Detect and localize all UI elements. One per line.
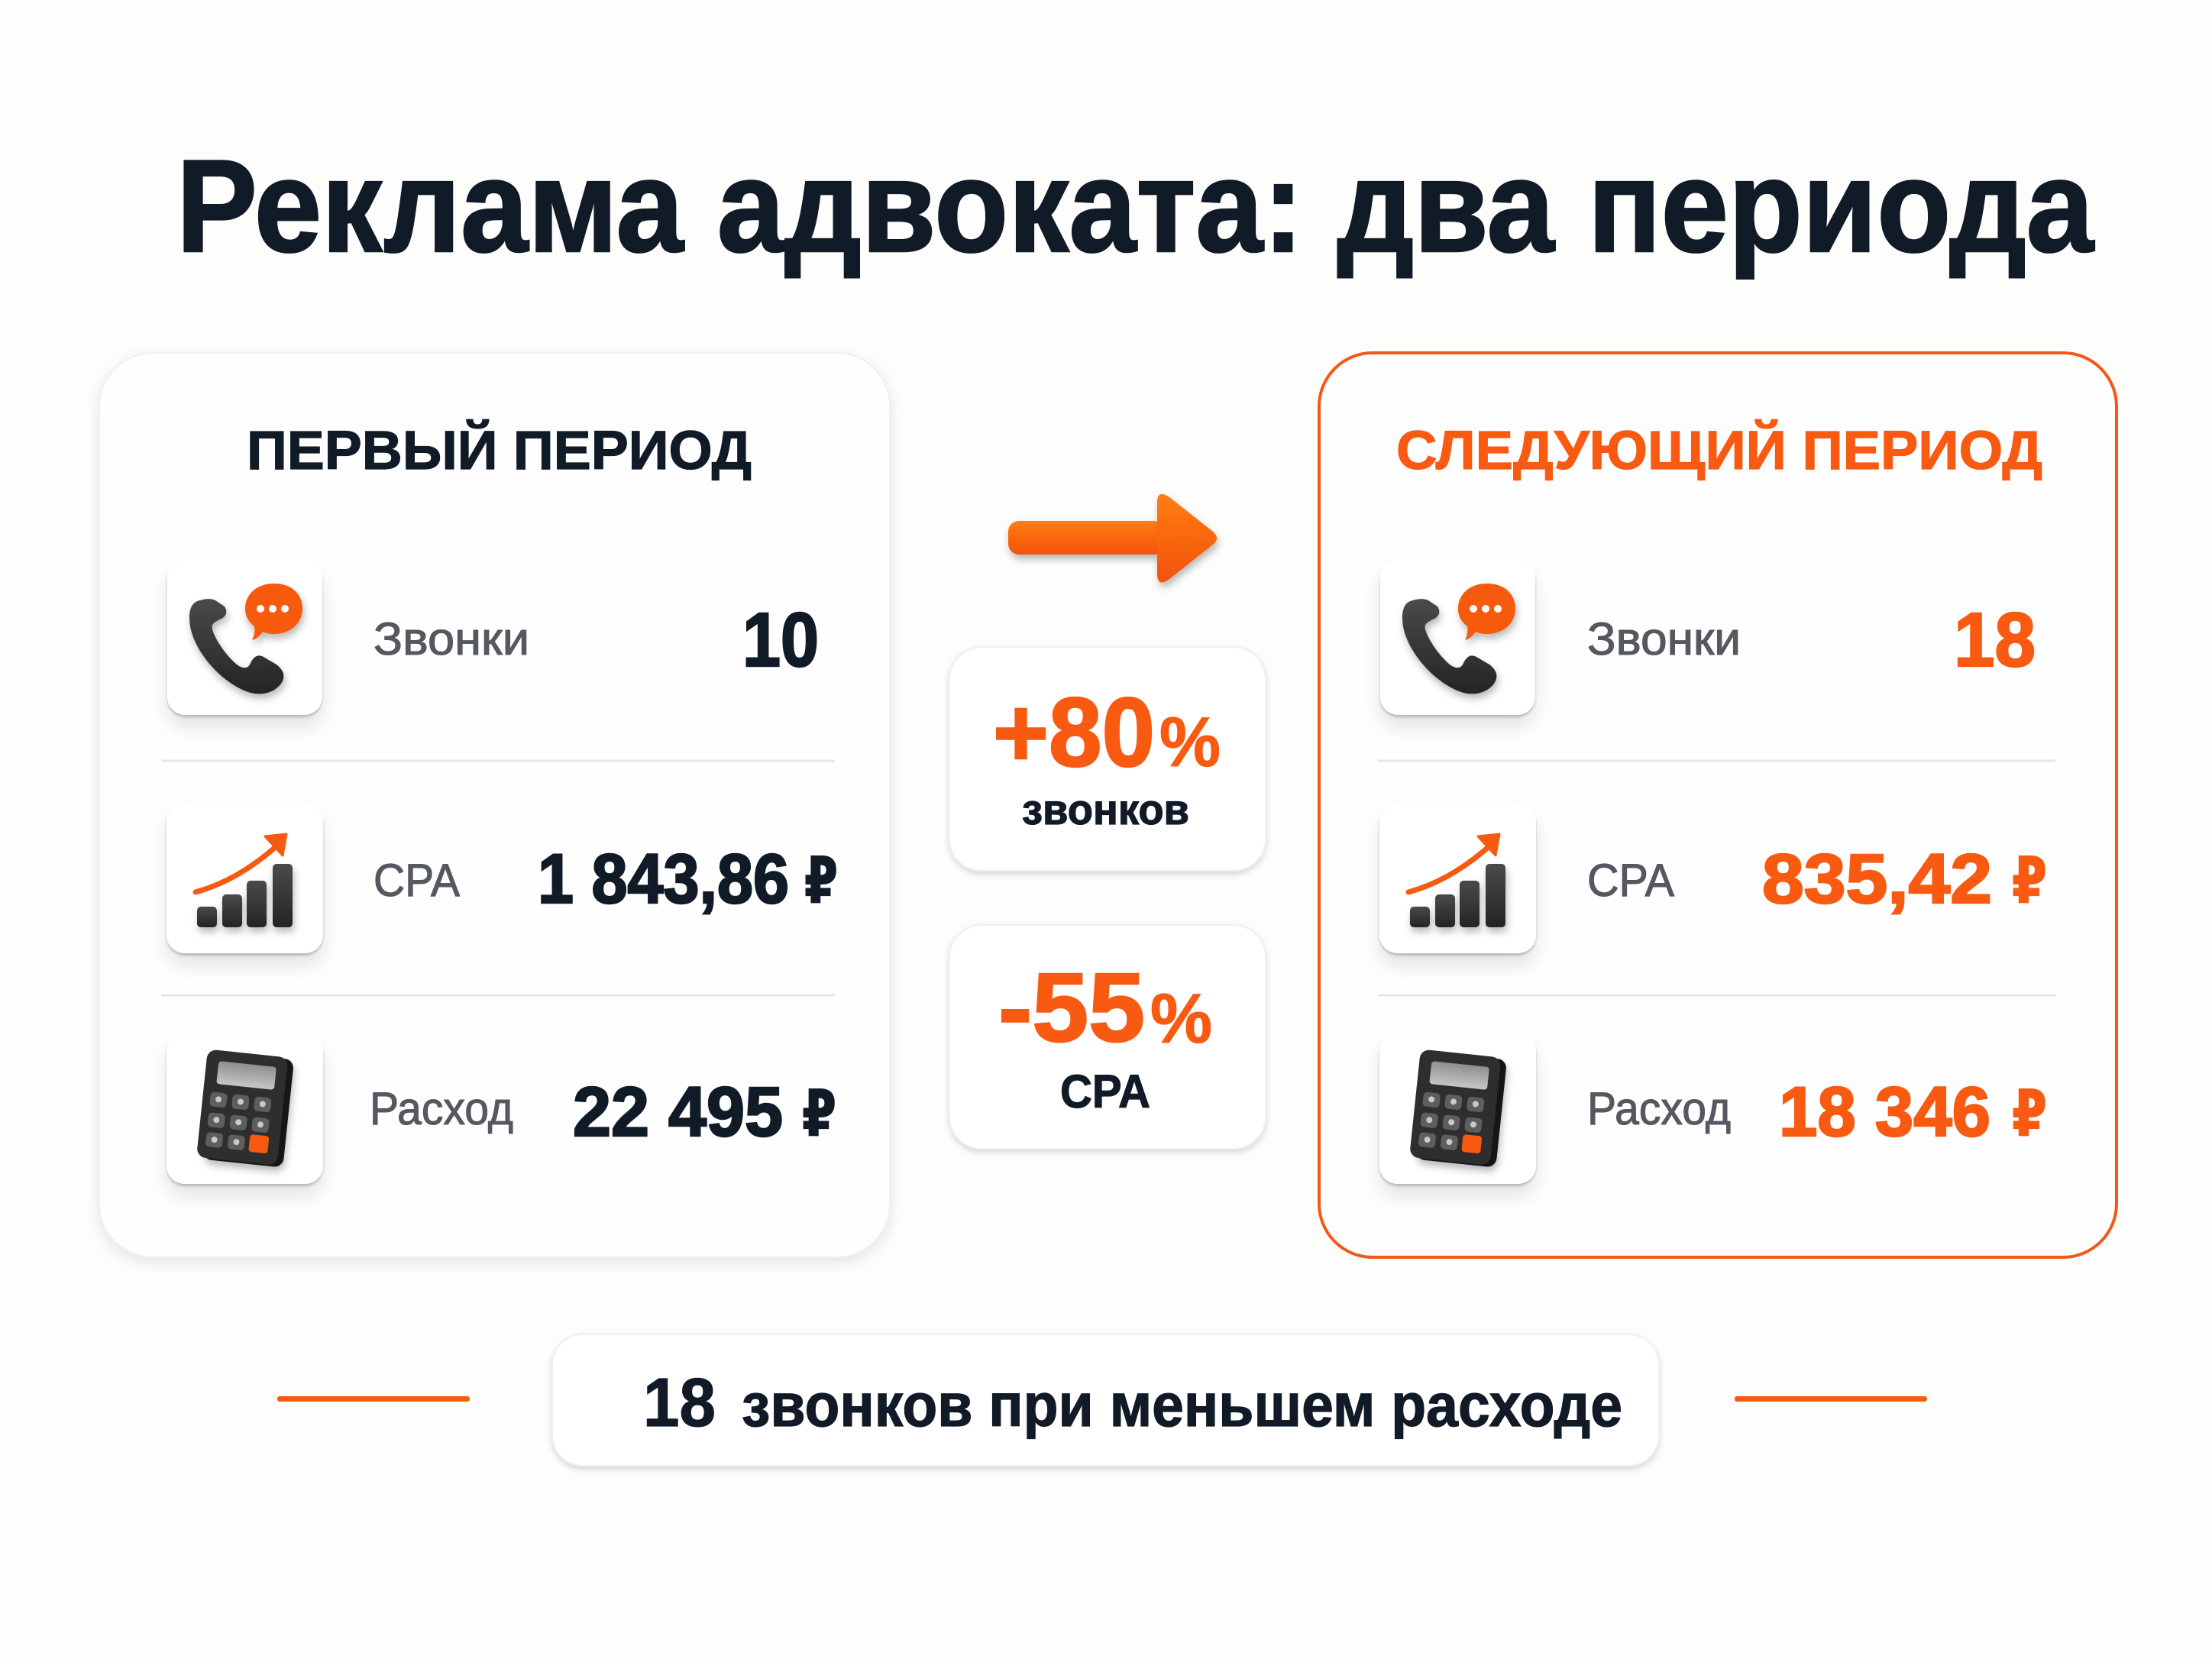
icon: phone with chat bubble bbox=[1380, 560, 1535, 715]
value: calls: 18 bbox=[1954, 597, 2036, 683]
value: spend: 18 346 bbox=[1779, 1073, 1990, 1151]
value: CPA: 835,42 bbox=[1762, 840, 1992, 918]
icon: calculator bbox=[1379, 1033, 1536, 1184]
label: spend: Расход bbox=[370, 1083, 513, 1134]
badge: CPA change bbox=[949, 925, 1266, 1149]
badge: calls change: звонков bbox=[1022, 785, 1189, 833]
icon: calculator bbox=[167, 1033, 323, 1184]
title: Реклама адвоката: два периода bbox=[176, 133, 2094, 280]
badge: calls change bbox=[949, 647, 1266, 871]
panel: next period bbox=[1319, 353, 2117, 1257]
value: CPA: 1 843,86 bbox=[538, 840, 789, 918]
summary pill: звонков при меньшем расходе bbox=[742, 1371, 1622, 1439]
label: calls: Звонки bbox=[1587, 613, 1741, 665]
icon: phone with chat bubble bbox=[167, 560, 322, 715]
panel: first period bbox=[99, 353, 890, 1257]
icon: growth chart bbox=[167, 804, 323, 953]
icon: growth chart bbox=[1379, 804, 1536, 953]
value: CPA: ₽ bbox=[2012, 845, 2047, 917]
label: CPA: CPA bbox=[1587, 855, 1674, 906]
label: CPA: CPA bbox=[374, 855, 460, 906]
arrow bbox=[1008, 494, 1217, 582]
label: calls: Звонки bbox=[374, 613, 529, 665]
summary pill: 18 bbox=[643, 1365, 716, 1441]
badge: CPA change: CPA bbox=[1060, 1066, 1150, 1117]
heading: next period: СЛЕДУЮЩИЙ ПЕРИОД bbox=[1396, 420, 2042, 481]
value: spend: ₽ bbox=[802, 1078, 836, 1150]
value: spend: 22 495 bbox=[573, 1073, 783, 1151]
accent line left bbox=[277, 1396, 470, 1402]
label: spend: Расход bbox=[1587, 1083, 1731, 1134]
heading: first period: ПЕРВЫЙ ПЕРИОД bbox=[247, 420, 752, 481]
value: calls: 10 bbox=[742, 597, 819, 683]
badge: calls change: +80 bbox=[993, 678, 1155, 787]
badge: CPA change: % bbox=[1150, 980, 1212, 1058]
badge: CPA change: -55 bbox=[998, 953, 1145, 1062]
summary pill bbox=[552, 1334, 1659, 1466]
accent line right bbox=[1735, 1396, 1927, 1402]
value: spend: ₽ bbox=[2012, 1078, 2047, 1150]
value: CPA: ₽ bbox=[804, 845, 838, 917]
badge: calls change: % bbox=[1159, 703, 1221, 781]
